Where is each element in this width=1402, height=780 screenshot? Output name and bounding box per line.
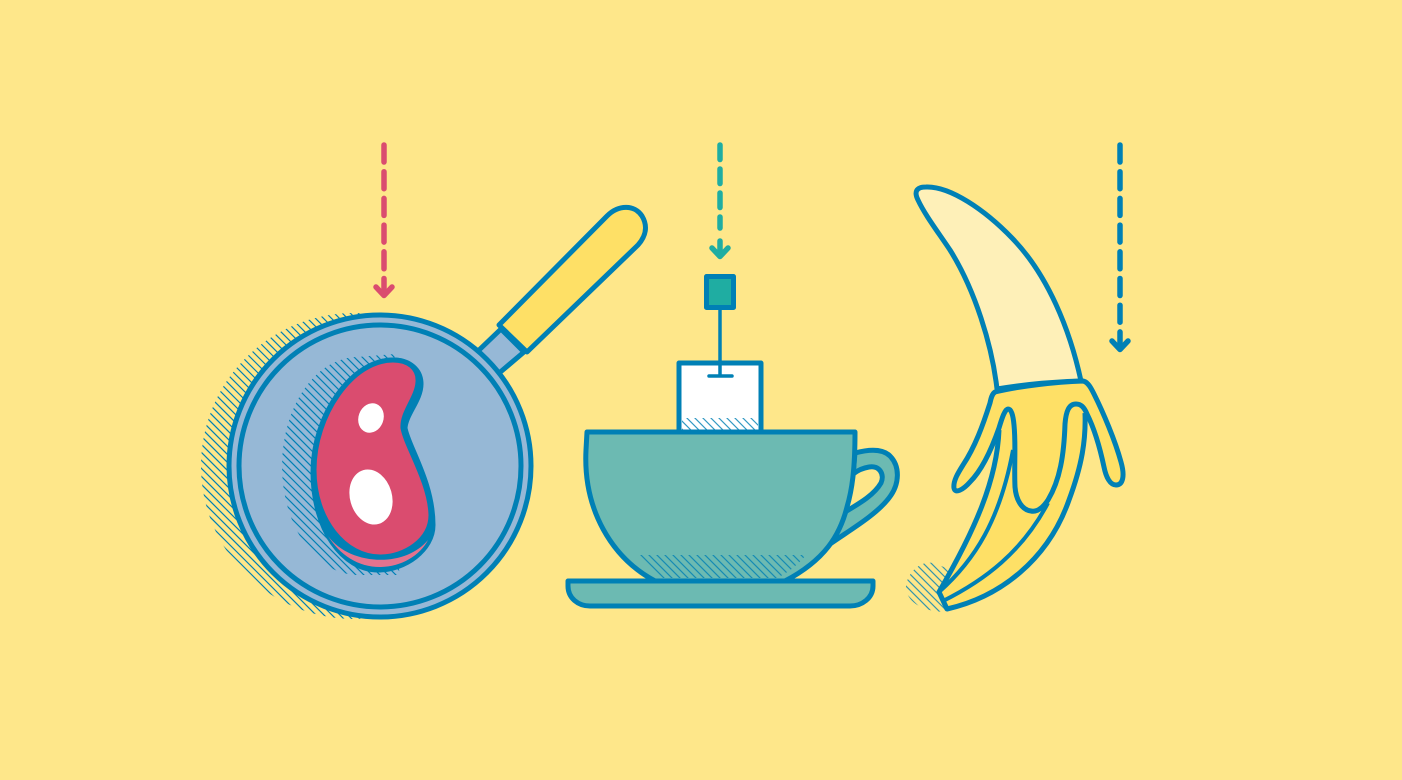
steak shadow hatching (282, 354, 400, 575)
pan (201, 204, 648, 620)
saucer (568, 581, 873, 606)
tea bag (679, 363, 761, 433)
banana flesh (916, 187, 1081, 389)
teacup (566, 274, 900, 608)
banana peel outline (939, 413, 1085, 609)
cup handle (830, 450, 897, 544)
pan inner circle (239, 325, 521, 607)
tea tag (706, 276, 734, 308)
arrow: red (376, 145, 392, 296)
banana peel flaps (954, 381, 1123, 511)
banana shadow hatching (906, 562, 948, 612)
banana peel fill (939, 400, 1085, 609)
banana inner lines (939, 450, 1048, 601)
pan shadow hatching (201, 313, 361, 619)
pan rim (229, 315, 531, 617)
cup hatching (640, 555, 804, 578)
illustration: pan, teacup and banana (201, 142, 1131, 620)
tea bag hatching (682, 418, 758, 430)
pan handle (499, 207, 645, 352)
steak fat large (343, 464, 399, 530)
banana (906, 184, 1126, 612)
pan neck (477, 329, 524, 374)
arrow: blue (1112, 145, 1128, 350)
string (709, 308, 732, 376)
steak top (314, 360, 431, 557)
steak underside (313, 360, 433, 570)
arrow: teal (712, 145, 728, 256)
steak (313, 360, 433, 570)
cup body (586, 432, 855, 581)
steak side highlight (328, 536, 428, 567)
steak fat small (354, 400, 388, 436)
